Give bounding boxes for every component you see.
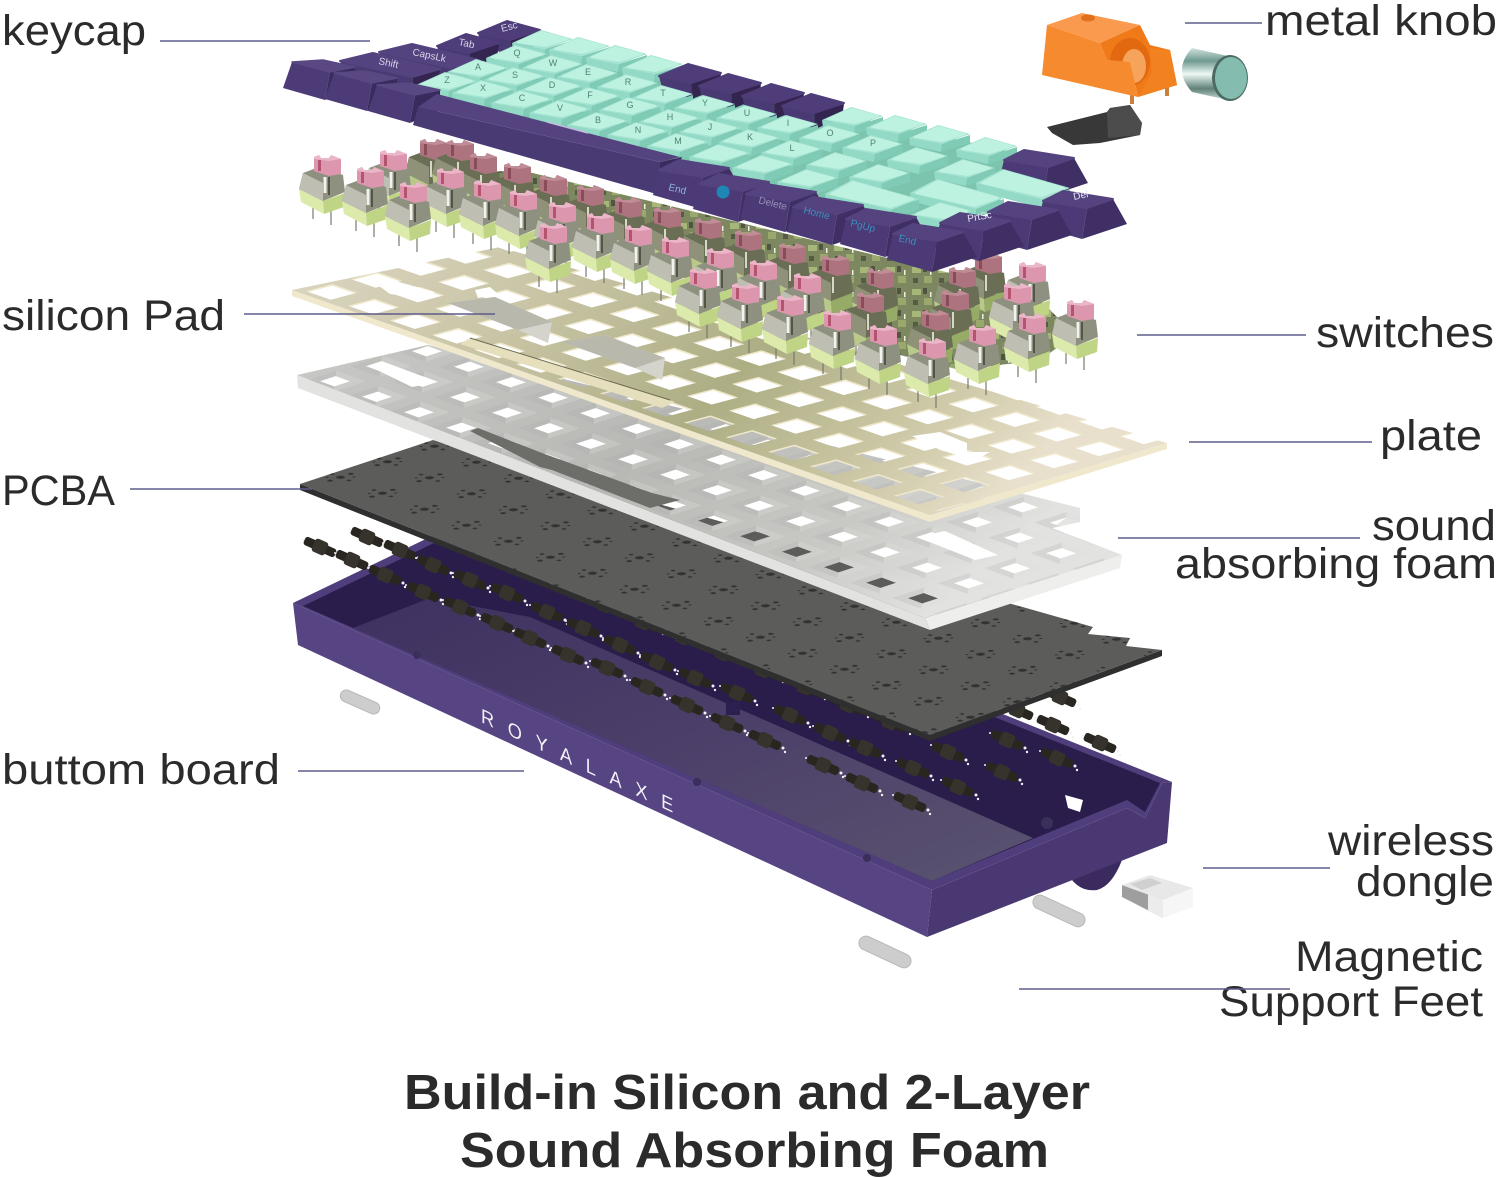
metal cylinder [1182,48,1248,101]
label: keycap: keycap [2,7,146,55]
hot-swap sockets [302,526,1121,815]
letter legends on mint keys: S [512,70,518,80]
bottom board case [293,508,1172,937]
letter legends on mint keys: K [747,132,753,142]
letter legends on mint keys: F [587,90,593,100]
row 4 [340,53,972,229]
key legends: Tab [457,37,476,51]
wireless dongle icon [1122,875,1193,918]
key legends: Shift [377,56,399,71]
title: Sound Absorbing Foam [460,1124,1049,1178]
label: sound absorbing foam [1118,502,1497,588]
brand text: ROYALAXE [481,705,687,824]
label: Magnetic Support Feet: Support Feet [1219,978,1483,1026]
letter legends on mint keys: A [475,62,481,72]
label: switches: switches [1316,309,1494,357]
black mechanism [1047,105,1142,145]
label: Magnetic Support Feet [1019,933,1483,1026]
large foam cutouts [375,366,438,387]
letter legends on mint keys: O [826,128,834,138]
title: Build-in Silicon and 2-Layer [404,1066,1090,1120]
switches [299,139,1098,408]
key legends: PgUp [849,218,877,235]
key legends: End [667,182,687,197]
foam stabilizer slot [470,428,680,508]
letter legends on mint keys: H [667,112,673,122]
letter legends on mint keys: J [708,122,712,132]
magnetic support feet [338,688,1087,970]
letter legends on mint keys: M [674,136,682,146]
key legends: Esc [500,20,519,35]
label: sound absorbing foam: absorbing foam [1175,540,1497,588]
label: Magnetic Support Feet: Magnetic [1295,933,1483,981]
letter legends on mint keys: C [519,93,526,103]
letter legends on mint keys: Z [444,75,450,85]
letter legends on mint keys: V [557,103,563,113]
label: PCBA: PCBA [2,467,115,515]
rubber foot bump [1072,860,1122,890]
letter legends on mint keys: N [635,125,641,135]
row 5 front [283,60,977,272]
letter legends on mint keys: T [660,88,666,98]
row 2 [437,34,1070,208]
key legends: CapsLk [411,47,448,65]
letter legends on mint keys: B [595,115,601,125]
label: sound absorbing foam: sound [1372,502,1496,550]
label: plate: plate [1380,412,1482,460]
label: wireless dongle [1203,817,1494,906]
PCBA board [300,440,1162,741]
key legends [377,20,1089,248]
letter legends on mint keys: Q [513,48,521,58]
row 3 [379,44,1004,218]
key legends: Delete [757,195,788,213]
switch shadow filler [440,170,1075,370]
plate cutouts [375,281,435,298]
key legends: PrtSc [967,210,993,225]
letter legends on mint keys: I [787,118,789,128]
key legends: Home [802,205,831,222]
keycaps [283,20,1127,272]
space bar [413,94,682,195]
key legends: Del [1072,189,1089,203]
key legends: End [897,233,917,248]
label: wireless dongle: wireless [1327,817,1494,865]
orange knob housing [1042,13,1177,104]
letter legends on mint keys: X [480,83,486,93]
letter legends on mint keys: G [626,100,634,110]
metal knob assembly [1042,13,1248,145]
sound absorbing foam [297,345,1122,630]
letter legends on mint keys: D [549,80,556,90]
letter legends on mint keys: E [585,67,591,77]
letter legends on mint keys: R [625,77,632,87]
row 1 [478,21,1088,198]
label: silicon Pad: silicon Pad [2,292,225,340]
letter legends on mint keys: W [549,58,558,68]
title [404,1066,1090,1178]
silicon pad and plate [292,247,1167,522]
label: buttom board: buttom board [2,746,280,794]
label: wireless dongle: dongle [1356,858,1494,906]
letter legends on mint keys: P [870,138,876,148]
letter legends on mint keys [444,48,876,153]
letter legends on mint keys: Y [702,98,708,108]
silicon pad strips [448,297,552,343]
letter legends on mint keys: L [789,143,795,153]
right end keys [934,191,1127,261]
letter legends on mint keys: U [744,108,750,118]
